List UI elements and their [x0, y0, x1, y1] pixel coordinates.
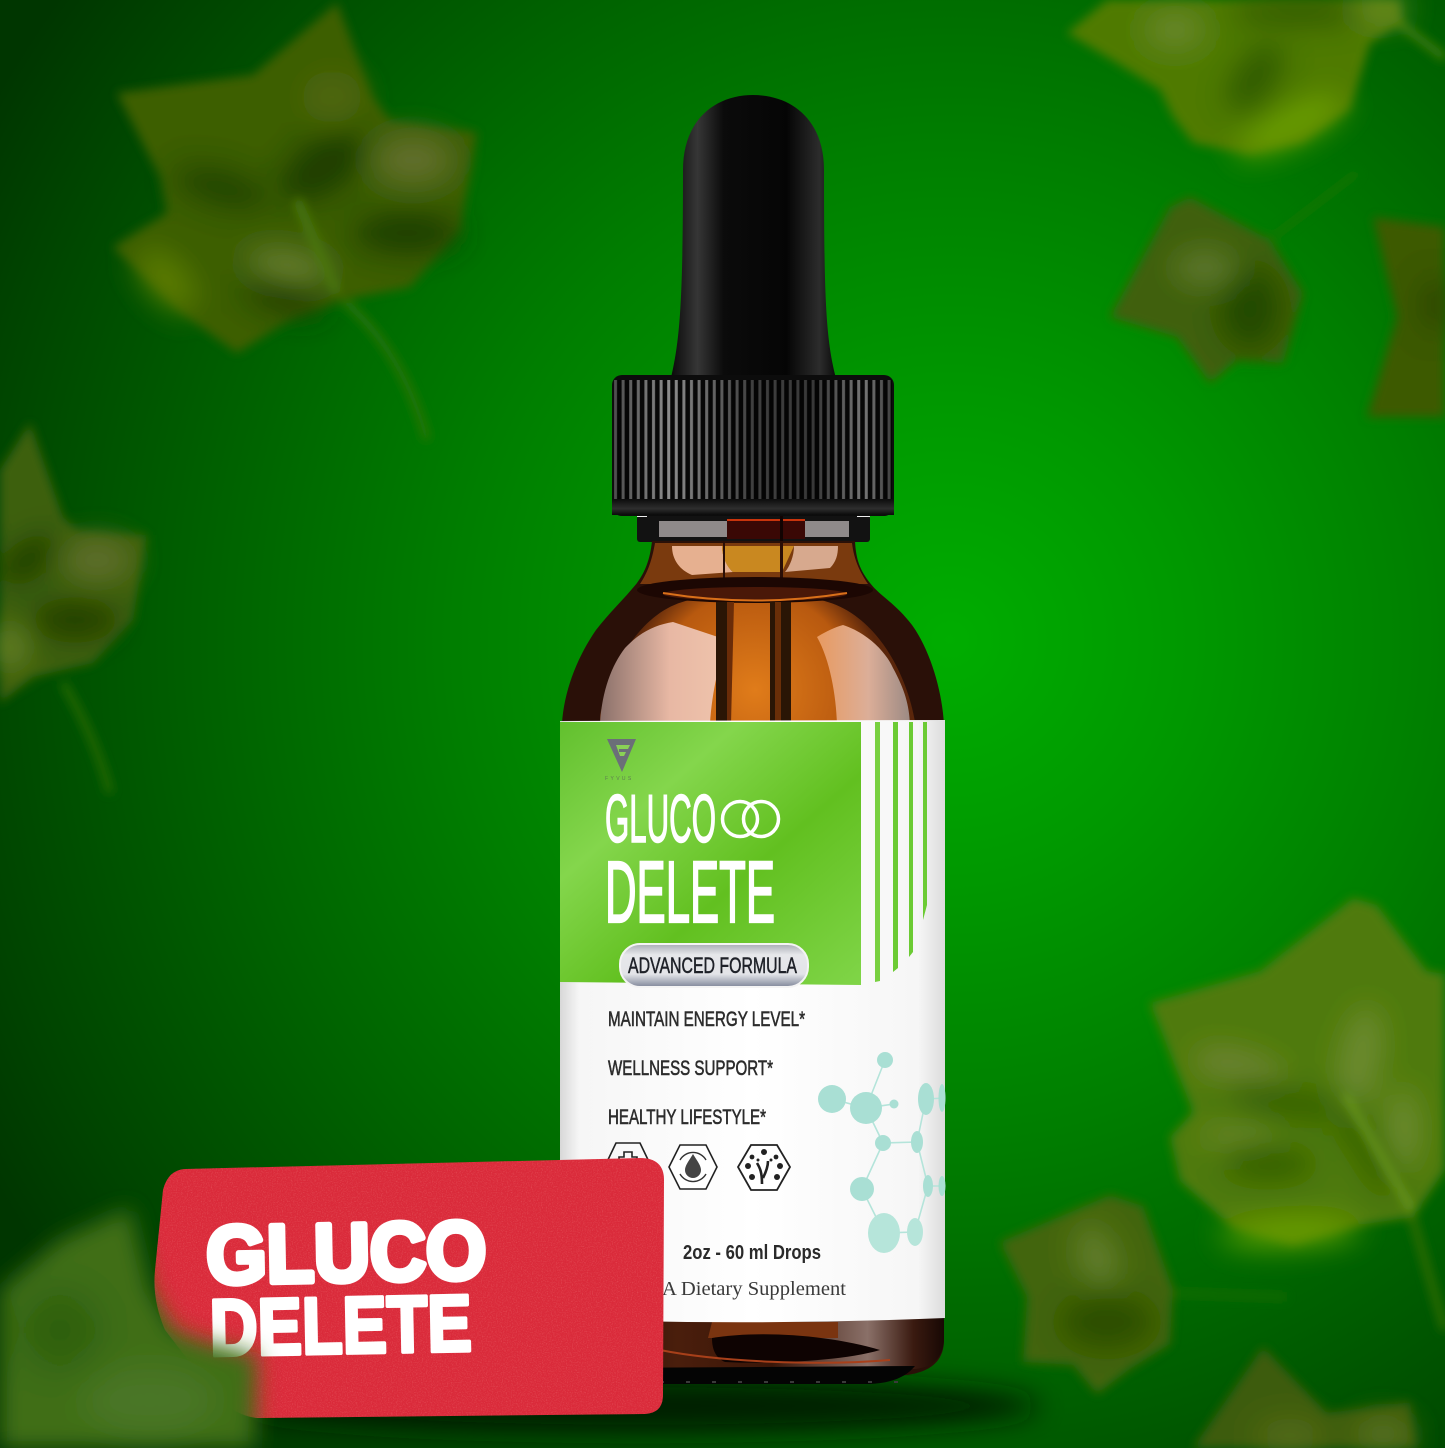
icon: medical hexagon [605, 1143, 651, 1189]
product name: DELETE [605, 844, 775, 941]
leaf: lower centre right [1000, 1195, 1287, 1394]
card title [205, 1205, 489, 1373]
size text: 2oz - 60 ml Drops [683, 1242, 821, 1264]
card title: GLUCO [205, 1205, 487, 1302]
benefits list: HEALTHY LIFESTYLE* [608, 1106, 766, 1129]
supplement text: A Dietary Supplement [662, 1278, 846, 1300]
product name: GLUCO [605, 781, 716, 857]
glass highlight right [817, 625, 910, 724]
black cap [612, 375, 894, 516]
benefits list: MAINTAIN ENERGY LEVEL* [608, 1008, 805, 1031]
molecule graphic [818, 1052, 946, 1253]
leaf: left middle [0, 423, 147, 793]
neck ring [637, 515, 870, 542]
leaf: top left [113, 3, 477, 440]
icon: water drop hexagon [669, 1145, 717, 1189]
label [560, 720, 946, 1322]
ground shadow [240, 1378, 1040, 1434]
brand logo: FYVUS [605, 776, 634, 782]
benefits list: WELLNESS SUPPORT* [608, 1057, 773, 1080]
dropper bottle [560, 95, 946, 1384]
badge: advanced formula [620, 944, 808, 987]
leaf: bottom left foreground [0, 1208, 257, 1448]
leaf: far right [1367, 217, 1445, 417]
benefits list [608, 1008, 805, 1129]
label green panel with stripes [560, 722, 861, 985]
amber glass body [562, 541, 944, 1376]
icon: wellness hexagon [738, 1145, 790, 1190]
card title: DELETE [209, 1278, 473, 1373]
label white base [560, 720, 945, 1322]
product name [605, 781, 775, 941]
leaf: top right [1067, 0, 1445, 167]
leaf: bottom right [1193, 1347, 1417, 1448]
icon: linked rings [722, 802, 778, 836]
leaf: right middle [1110, 172, 1358, 383]
card shape [154, 1158, 664, 1418]
brand logo [605, 739, 636, 782]
badge: advanced formula: ADVANCED FORMULA [628, 953, 797, 978]
red product card [154, 1158, 664, 1418]
bottle base [562, 1315, 944, 1384]
leaf: right lower large [1150, 898, 1445, 1330]
dropper bulb [671, 95, 836, 378]
glass highlight left [600, 622, 727, 724]
